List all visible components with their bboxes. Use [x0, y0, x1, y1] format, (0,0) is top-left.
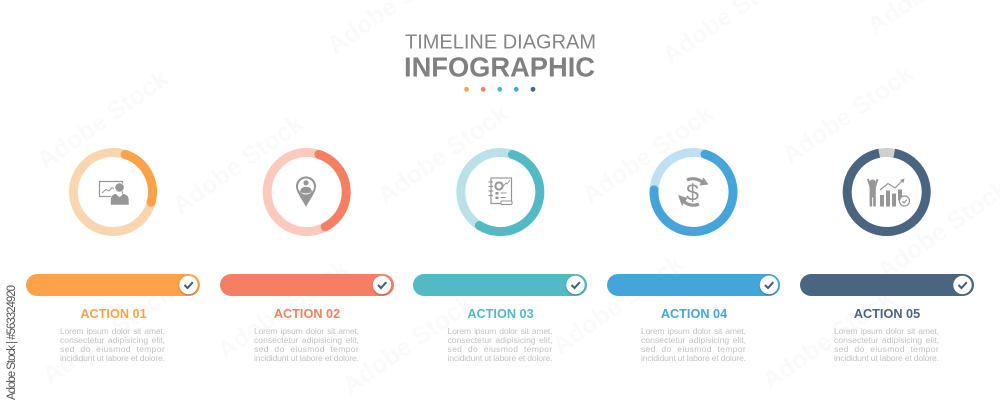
text: Adobe Stock: [337, 289, 479, 400]
stock credit: Adobe Stock | #563324920: [6, 285, 18, 400]
icon: dollar exchange: [678, 178, 708, 206]
label: action 01: ACTION 01: [80, 307, 147, 321]
panel: action 05: [800, 146, 974, 363]
text: Adobe Stock: [757, 284, 899, 395]
check badge 4: [760, 276, 778, 294]
label: action 05: ACTION 05: [854, 307, 920, 321]
description 4: consectetur adipisicing elit,: [641, 335, 746, 345]
progress bar 4: [607, 274, 780, 296]
text: Adobe Stock: [577, 99, 719, 210]
check badge 3: [566, 276, 585, 294]
description 2: incididunt ut labore et dolore.: [254, 353, 359, 363]
progress bar 3: [413, 274, 587, 296]
description 5: [834, 326, 939, 363]
text: Adobe Stock: [777, 59, 919, 170]
progress bar 2: [220, 274, 394, 296]
description 5: consectetur adipisicing elit,: [834, 335, 939, 345]
text: Adobe Stock: [547, 249, 689, 360]
icon: dollar exchange: $: [686, 180, 699, 206]
label: action 03: ACTION 03: [467, 307, 534, 321]
progress ring 1: [63, 142, 163, 242]
description 4: [641, 326, 746, 363]
description 1: Lorem ipsum dolor sit amet,: [60, 326, 165, 336]
icon: growth chart with person: [868, 178, 910, 206]
check badge 1: [179, 276, 198, 294]
panel: action 01: [26, 142, 200, 363]
description 5: incididunt ut labore et dolore.: [834, 353, 939, 363]
progress ring 3: [451, 142, 550, 242]
description 1: consectetur adipisicing elit,: [60, 335, 165, 345]
title: [404, 30, 596, 92]
progress ring 4: [644, 143, 743, 241]
progress bar 5: [800, 274, 974, 296]
description 3: [448, 326, 552, 363]
text: Adobe Stock: [167, 109, 309, 220]
check badge 5: [953, 276, 972, 294]
description 3: consectetur adipisicing elit,: [448, 335, 552, 345]
description 4: incididunt ut labore et dolore.: [641, 353, 746, 363]
description 3: sed do eiusmod tempor: [448, 344, 552, 354]
description 5: Lorem ipsum dolor sit amet,: [834, 326, 939, 336]
description 2: [254, 326, 359, 363]
text: Adobe Stock: [212, 254, 354, 365]
description 3: incididunt ut labore et dolore.: [448, 353, 552, 363]
description 2: Lorem ipsum dolor sit amet,: [254, 326, 359, 336]
progress bar 1: [26, 274, 200, 296]
description 3: Lorem ipsum dolor sit amet,: [448, 326, 552, 336]
icon: presenter with chart board: [100, 182, 129, 205]
panel: action 02: [220, 142, 394, 363]
progress ring 2: [257, 142, 356, 242]
description 2: consectetur adipisicing elit,: [254, 335, 359, 345]
description 4: Lorem ipsum dolor sit amet,: [641, 326, 746, 336]
icon: location pin: [296, 176, 316, 207]
title line 2: INFOGRAPHIC: [404, 52, 595, 82]
label: action 04: ACTION 04: [661, 307, 727, 321]
description 4: sed do eiusmod tempor: [641, 344, 746, 354]
title line 1: TIMELINE DIAGRAM: [405, 30, 596, 54]
description 2: sed do eiusmod tempor: [254, 344, 359, 354]
text: Adobe Stock: [37, 279, 179, 390]
description 1: [60, 326, 165, 363]
panel: action 04: [607, 143, 780, 363]
title dots: [464, 87, 535, 92]
label: action 02: ACTION 02: [274, 307, 340, 321]
description 1: sed do eiusmod tempor: [60, 344, 165, 354]
icon: notebook: [488, 178, 512, 204]
check badge 2: [373, 276, 391, 294]
description 5: sed do eiusmod tempor: [834, 344, 939, 354]
description 1: incididunt ut labore et dolore.: [60, 353, 165, 363]
text: Adobe Stock: [372, 99, 514, 210]
progress ring 5: [840, 146, 933, 238]
text: Adobe Stock: [32, 64, 174, 175]
panel: action 03: [413, 142, 587, 363]
